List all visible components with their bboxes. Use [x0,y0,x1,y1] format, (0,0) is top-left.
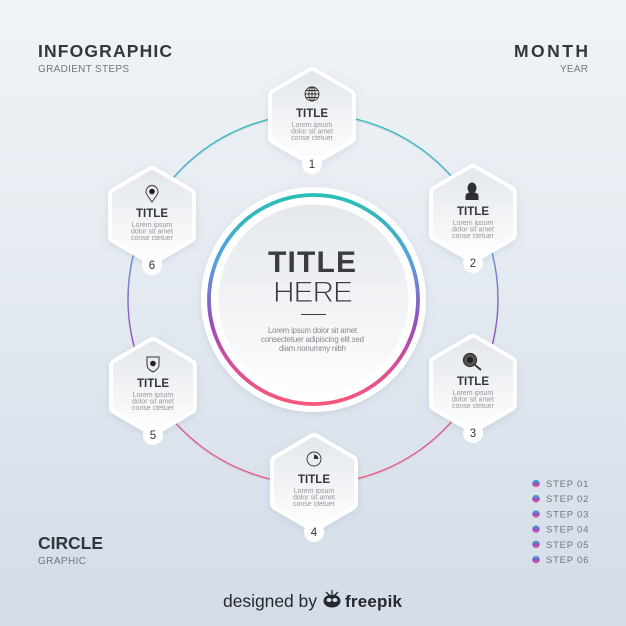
heading: circle [38,533,103,567]
heading: infographic: GRADIENT STEPS [38,64,129,75]
step 1 hexagon [276,75,348,174]
step 1 hexagon: dolor sit amet [291,128,333,136]
heading: month [514,41,588,75]
legend: steps: STEP 03 [546,510,589,520]
step 2 hexagon: Lorem ipsum [453,220,493,227]
legend: steps: STEP 04 [546,524,589,536]
step 5 hexagon: dolor sit amet [132,398,174,406]
legend: steps: STEP 06 [546,555,589,566]
legend: steps: STEP 05 [546,540,589,551]
heading: infographic [38,41,172,75]
step 1 hexagon: TITLE [296,108,328,120]
step 4 hexagon [278,441,350,542]
step 2 hexagon: TITLE [457,206,489,218]
step 6 hexagon: TITLE [136,208,168,220]
central title: TITLE [268,246,356,279]
step 4 hexagon: conse ctetuer [293,501,336,508]
credit: freepik: designed by [223,591,317,611]
icon: globe [305,87,319,101]
central body text: consectetuer adipiscing elit sed [261,335,364,344]
central body text: Lorem ipsum dolor sit amet [268,326,358,335]
heading: month: YEAR [560,64,588,75]
step 5 hexagon: conse ctetuer [132,405,175,412]
heading: infographic: INFOGRAPHIC [38,41,172,61]
number 4: 4 [311,527,318,539]
icon: person [466,182,478,200]
step 3 hexagon [437,342,509,443]
step 6 hexagon: dolor sit amet [131,228,173,236]
legend: steps: STEP 01 [546,479,589,490]
step 6 hexagon: conse ctetuer [131,235,174,242]
central divider [301,314,326,315]
central body text [261,326,364,353]
step 4 hexagon: Lorem ipsum [294,488,334,495]
legend: steps [532,479,589,566]
step 3 hexagon: Lorem ipsum [453,390,493,397]
credit: freepik [223,590,403,611]
number 6: 6 [149,260,155,272]
step 4 hexagon: dolor sit amet [293,494,335,502]
step 2 hexagon: conse ctetuer [452,233,495,240]
icon: magnifier [464,354,481,370]
step 2 hexagon [437,172,509,273]
icon: map pin [146,186,158,202]
step 3 hexagon: dolor sit amet [452,396,494,404]
outer gradient circle [128,114,498,485]
step 5 hexagon [117,345,189,445]
step 6 hexagon [116,174,188,275]
heading: circle: GRAPHIC [38,556,86,567]
step 5 hexagon: TITLE [137,378,169,390]
step 4 hexagon: TITLE [298,474,330,486]
legend: steps: STEP 02 [546,494,589,505]
heading: circle: CIRCLE [38,533,103,553]
number 1: 1 [309,159,315,171]
icon: pie chart [307,452,321,466]
step 1 hexagon: conse ctetuer [291,135,334,142]
step 2 hexagon: dolor sit amet [452,226,494,234]
number 5: 5 [150,430,156,442]
central circle [201,187,426,412]
step 3 hexagon: conse ctetuer [452,403,495,410]
heading: month: MONTH [514,41,588,61]
credit: freepik: freepik [345,592,403,611]
central subtitle: HERE [273,276,353,309]
central body text: diam nonummy nibh [279,344,346,353]
number 2: 2 [470,258,476,270]
step 5 hexagon: Lorem ipsum [133,392,173,399]
step 6 hexagon: Lorem ipsum [132,222,172,229]
step 1 hexagon: Lorem ipsum [292,122,332,129]
number 3: 3 [470,428,476,440]
icon: shield [147,357,159,372]
step 3 hexagon: TITLE [457,376,489,388]
